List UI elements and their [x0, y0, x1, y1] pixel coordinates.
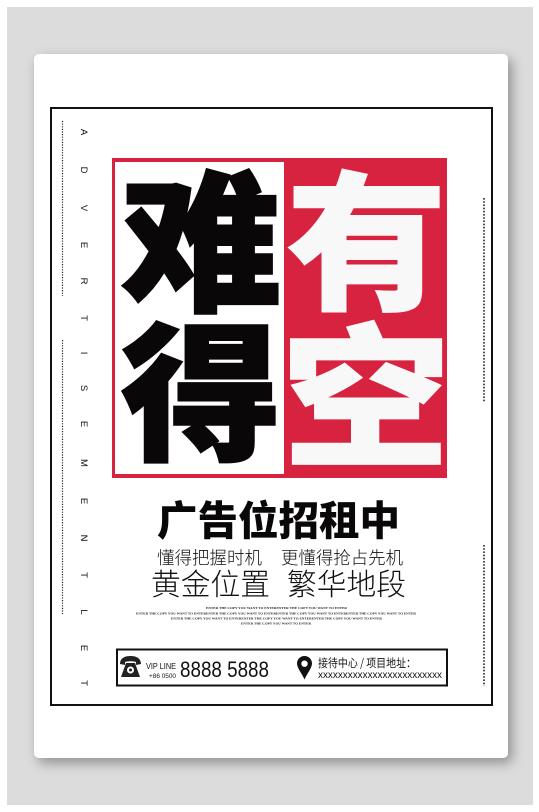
small english copy: ENTER THE COPY YOU WANT TO ENTER [241, 622, 312, 626]
contact box [117, 650, 447, 686]
address label: 接待中心 / 项目地址： [318, 655, 416, 671]
icon: telephone [120, 656, 141, 677]
poster card [34, 54, 508, 758]
vertical text: ADVERTISEMENTLET: S [78, 385, 89, 391]
vertical text: ADVERTISEMENTLET: L [78, 609, 89, 615]
VIP line label: VIP LINE [146, 661, 176, 671]
headline: 有空 [282, 124, 450, 499]
vertical text: ADVERTISEMENTLET: T [78, 572, 89, 578]
slogan line 1: 更懂得抢占先机 [281, 545, 403, 570]
vertical text: ADVERTISEMENTLET: N [78, 535, 89, 542]
headline: 难得 [121, 123, 282, 492]
white title panel [115, 162, 284, 474]
red title panel [112, 158, 447, 478]
address value: xxxxxxxxxxxxxxxxxxxxxxxxx [318, 670, 442, 681]
vertical text: ADVERTISEMENTLET [78, 129, 89, 686]
VIP line label [146, 661, 176, 680]
vertical text: ADVERTISEMENTLET: V [78, 205, 89, 212]
slogan line 2 [151, 560, 406, 604]
outer black frame [51, 108, 492, 705]
headline: 有空: 空 [282, 277, 450, 499]
headline: 有空: 有 [286, 124, 447, 341]
slogan line 1 [157, 545, 403, 570]
vertical text: ADVERTISEMENTLET: E [78, 498, 89, 504]
vertical text: ADVERTISEMENTLET: E [78, 242, 89, 248]
headline: 难得: 难 [121, 123, 282, 344]
slogan line 2: 黄金位置 [151, 560, 270, 604]
vertical text: ADVERTISEMENTLET: T [78, 680, 89, 686]
vertical text: ADVERTISEMENTLET: A [78, 129, 89, 136]
subtitle: 广告位招租中 [157, 488, 400, 547]
vertical text: ADVERTISEMENTLET: D [78, 167, 89, 174]
small english copy: ENTER THE COPY YOU WANT TO ENTERENTER THE COPY YOU WANT TO ENTER [206, 606, 348, 610]
slogan line 1: 懂得把握时机 [157, 545, 262, 570]
headline: 难得: 得 [121, 275, 282, 492]
small english copy: ENTER THE COPY YOU WANT TO ENTERENTER THE COPY YOU WANT TO ENTERENTER THE COPY YOU WANT TO ENTER [171, 616, 383, 620]
vertical text: ADVERTISEMENTLET: R [78, 278, 89, 285]
dotted lines left [62, 121, 64, 614]
slogan line 2: 繁华地段 [287, 560, 406, 604]
vertical text: ADVERTISEMENTLET: M [78, 459, 89, 467]
VIP line label: +86 0500 [149, 673, 176, 680]
icon: map pin [297, 656, 312, 680]
small english copy [136, 606, 417, 626]
phone number: 8888 5888 [180, 657, 269, 682]
vertical text: ADVERTISEMENTLET: E [78, 421, 89, 427]
small english copy: ENTER THE COPY YOU WANT TO ENTERENTER THE COPY YOU WANT TO ENTERENTER THE COPY YOU WANT TO ENTERENTER THE COPY YOU WANT TO ENTER [136, 612, 417, 616]
vertical text: ADVERTISEMENTLET: T [78, 315, 89, 321]
dotted lines right [483, 198, 485, 686]
vertical text: ADVERTISEMENTLET: E [78, 645, 89, 651]
vertical text: ADVERTISEMENTLET: I [78, 352, 89, 354]
